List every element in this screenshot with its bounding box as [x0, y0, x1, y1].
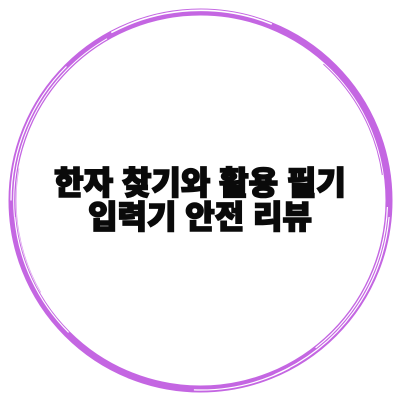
title — [54, 165, 346, 235]
title line 1: 한자 찾기와 활용 필기 — [54, 165, 346, 201]
title line 2: 입력기 안전 리뷰 — [88, 199, 312, 235]
